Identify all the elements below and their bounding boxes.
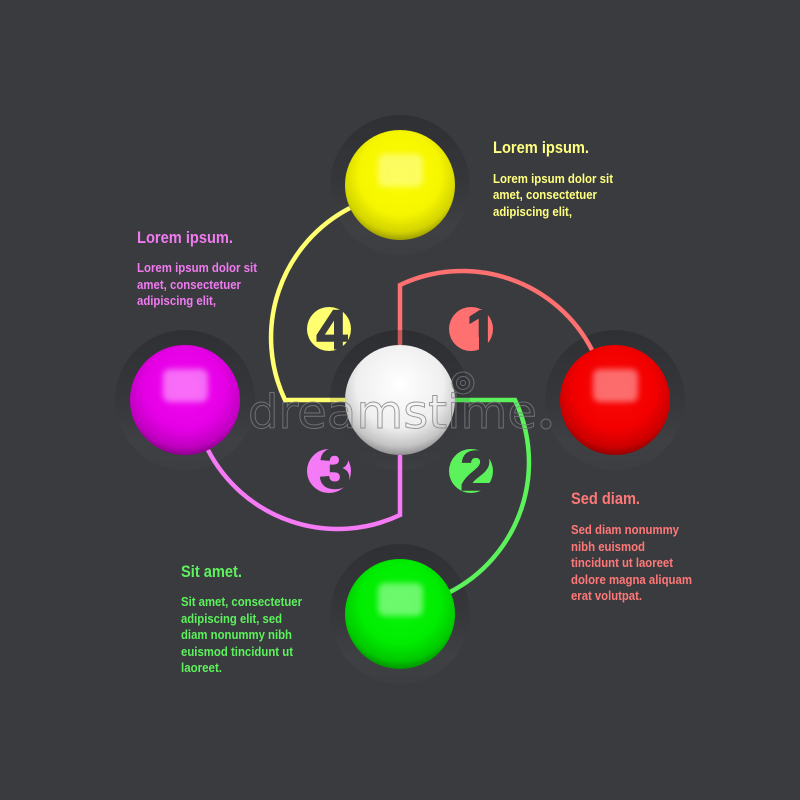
- text block: red: [571, 490, 692, 603]
- text block: yellow: [493, 139, 614, 219]
- text block: magenta: [137, 229, 258, 308]
- text block: red: erat volutpat.: [571, 588, 642, 603]
- text block: red: Sed diam nonummy: [571, 522, 680, 537]
- text block: green: adipiscing elit, sed: [181, 611, 282, 626]
- green sphere: [345, 559, 455, 669]
- connector: red line: [400, 271, 592, 350]
- halo: magenta: [115, 330, 255, 470]
- text block: red: nibh euismod: [571, 539, 645, 554]
- text block: magenta: Lorem ipsum dolor sit: [137, 260, 258, 275]
- text block: green: euismod tincidunt ut: [181, 644, 294, 659]
- watermark: dreamstime: [248, 385, 537, 439]
- connector: magenta line: [208, 450, 400, 529]
- text block: yellow: amet, consectetuer: [493, 187, 597, 202]
- text block: green: laoreet.: [181, 660, 222, 675]
- magenta sphere: [130, 345, 240, 455]
- text block: yellow: adipiscing elit,: [493, 204, 572, 219]
- halo: red: [545, 330, 685, 470]
- connector: green line: [450, 400, 529, 592]
- yellow sphere: [345, 130, 455, 240]
- text block: yellow: Lorem ipsum dolor sit: [493, 171, 614, 186]
- badge: number 3: 3: [319, 437, 351, 500]
- badge: number 4: 4: [316, 298, 348, 361]
- text block: red: Sed diam.: [571, 490, 640, 508]
- connector: yellow line: [271, 208, 350, 400]
- text block: green: Sit amet.: [181, 563, 242, 581]
- text block: magenta: Lorem ipsum.: [137, 229, 233, 247]
- text block: magenta: amet, consectetuer: [137, 277, 241, 292]
- badge: number 1: 1: [466, 298, 498, 361]
- halo: green: [330, 544, 470, 684]
- text block: green: Sit amet, consectetuer: [181, 594, 302, 609]
- text block: yellow: Lorem ipsum.: [493, 139, 589, 157]
- text block: red: tincidunt ut laoreet: [571, 555, 674, 570]
- text block: green: [181, 563, 302, 675]
- text block: magenta: adipiscing elit,: [137, 293, 216, 308]
- text block: green: diam nonummy nibh: [181, 627, 292, 642]
- center white sphere with halo: [330, 330, 470, 470]
- halo: yellow: [330, 115, 470, 255]
- badge: number 1: [449, 307, 493, 351]
- badge: number 2: 2: [460, 439, 492, 502]
- text block: red: dolore magna aliquam: [571, 572, 692, 587]
- red sphere: [560, 345, 670, 455]
